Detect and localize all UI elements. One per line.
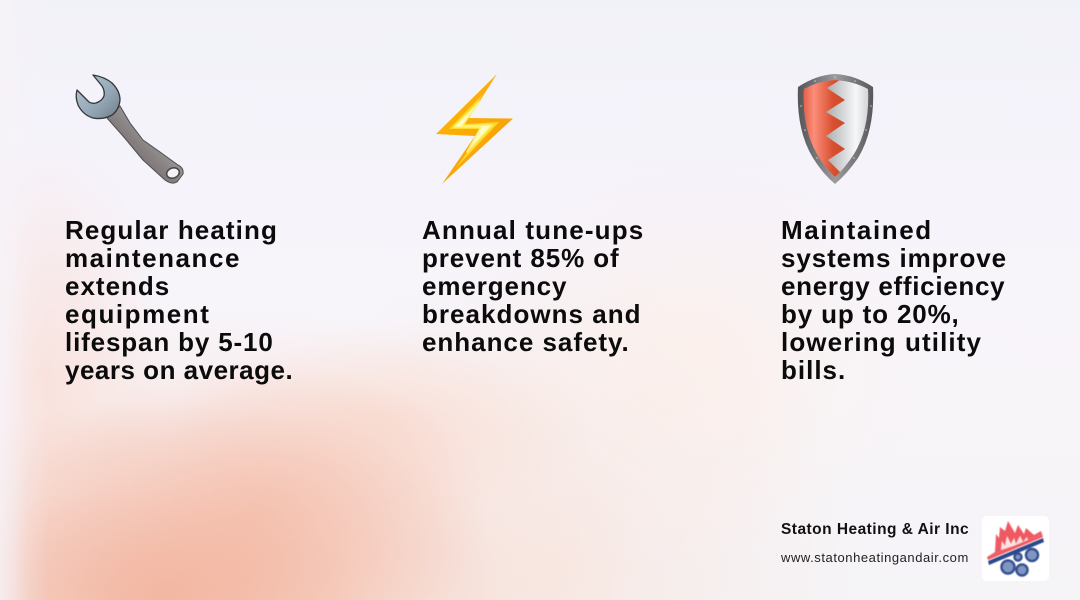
text: efficiency	[781, 215, 1007, 385]
text: tune-ups: Annual tune-ups	[422, 215, 644, 245]
text: lifespan: Regular heating	[65, 215, 278, 245]
text: tune-ups: enhance safety.	[422, 327, 630, 357]
text: lifespan	[65, 215, 293, 385]
text: efficiency: Maintained	[781, 215, 933, 245]
icon: wrench	[76, 74, 184, 184]
icon: lightning bolt	[436, 74, 513, 184]
text: lifespan: maintenance	[65, 243, 241, 273]
text: efficiency: bills.	[781, 355, 846, 385]
company name: Staton Heating & Air Inc	[781, 521, 969, 538]
logo	[982, 516, 1049, 581]
icon: shield	[798, 74, 874, 184]
text: tune-ups: emergency	[422, 271, 567, 301]
text: efficiency: by up to 20%,	[781, 299, 960, 329]
text: tune-ups: prevent 85% of	[422, 243, 620, 273]
text: efficiency: systems improve	[781, 243, 1007, 273]
text: lifespan: years on average.	[65, 355, 293, 385]
text: tune-ups: breakdowns and	[422, 299, 642, 329]
text: tune-ups	[422, 215, 644, 357]
text: efficiency: lowering utility	[781, 327, 982, 357]
website: www.statonheatingandair.com	[781, 550, 969, 565]
text: lifespan: extends	[65, 271, 170, 301]
text: efficiency: energy efficiency	[781, 271, 1005, 301]
text: lifespan: lifespan by 5-10	[65, 327, 274, 357]
text: lifespan: equipment	[65, 299, 210, 329]
